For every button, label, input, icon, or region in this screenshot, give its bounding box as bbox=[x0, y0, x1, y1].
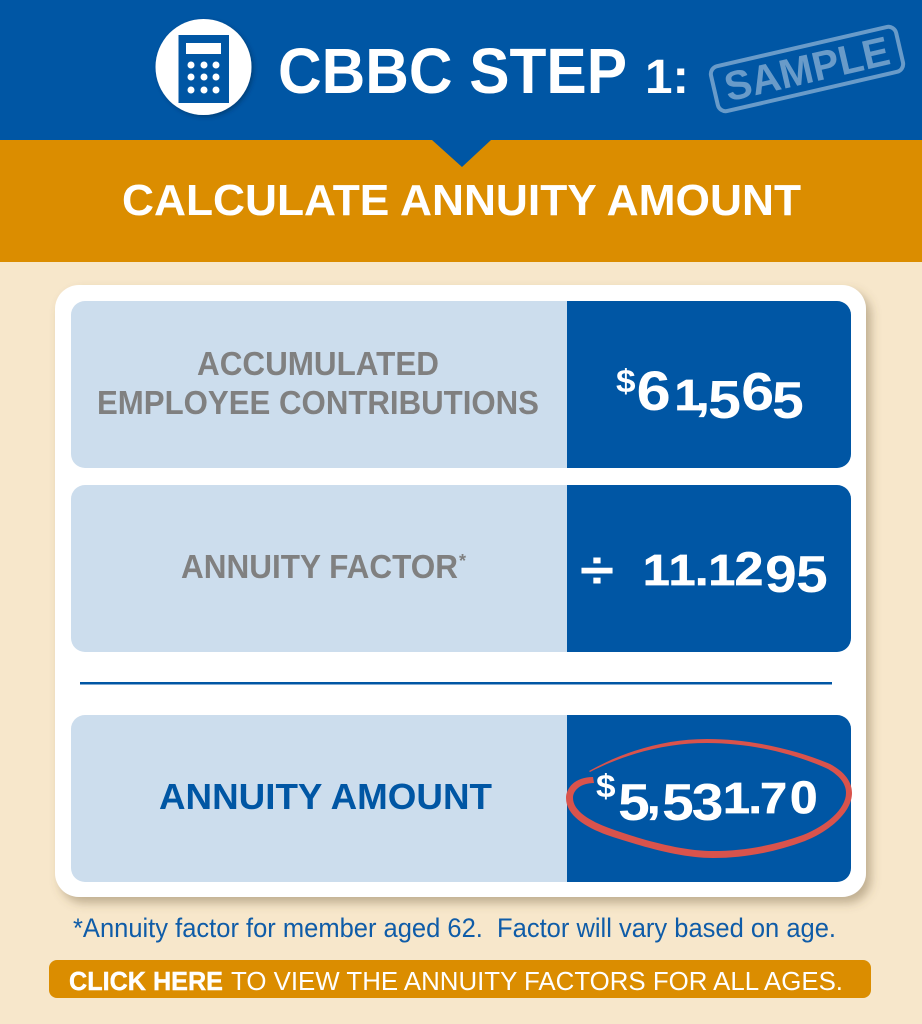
row: accumulated employee contributions: EMPLOYEE CONTRIBUTIONS bbox=[97, 384, 539, 421]
row: annuity factor: ANNUITY FACTOR bbox=[181, 548, 458, 585]
row: annuity factor: 5 bbox=[796, 545, 828, 603]
row: annuity amount: $ bbox=[596, 769, 616, 805]
row: annuity amount: 1 bbox=[723, 773, 750, 823]
row: annuity amount: 5 bbox=[662, 773, 694, 831]
button: click here: CLICK HERE bbox=[69, 966, 223, 996]
row: annuity factor: . bbox=[695, 545, 708, 595]
row: accumulated employee contributions: 5 bbox=[708, 370, 741, 430]
row: annuity amount: 7 bbox=[760, 773, 787, 823]
row: annuity amount: ANNUITY AMOUNT bbox=[159, 776, 492, 817]
row: annuity amount bbox=[71, 715, 852, 882]
row: annuity factor: ÷ bbox=[580, 542, 614, 600]
row: accumulated employee contributions: $ bbox=[616, 364, 636, 400]
row: annuity factor: 2 bbox=[735, 543, 763, 595]
row: accumulated employee contributions: 6 bbox=[637, 361, 671, 422]
button: click here bbox=[49, 960, 871, 998]
header band: step title bbox=[0, 0, 922, 140]
panel: calculation card bbox=[55, 285, 866, 897]
row: accumulated employee contributions: 1 bbox=[675, 370, 701, 420]
row: annuity factor: 9 bbox=[765, 545, 797, 603]
row: annuity factor: 1 bbox=[669, 545, 696, 595]
row: annuity factor: * bbox=[459, 551, 466, 571]
arrow: pointer from header bbox=[432, 140, 491, 167]
subtitle band bbox=[0, 140, 922, 262]
row: annuity factor: 1 bbox=[708, 545, 735, 595]
row: annuity amount: 3 bbox=[692, 773, 723, 831]
row: accumulated employee contributions: 6 bbox=[741, 362, 774, 422]
button: click here: TO VIEW THE ANNUITY FACTORS FOR ALL AGES. bbox=[231, 966, 843, 996]
row: accumulated employee contributions: ACCUMULATED bbox=[197, 345, 439, 382]
row: annuity amount: , bbox=[647, 773, 660, 823]
row: annuity factor: 1 bbox=[643, 545, 670, 595]
title: CBBC STEP bbox=[278, 35, 627, 107]
heading: calculate annuity amount: CALCULATE ANNUITY AMOUNT bbox=[122, 176, 801, 225]
title: 1: bbox=[645, 51, 689, 104]
divider bbox=[80, 682, 832, 684]
row: annuity amount: . bbox=[749, 773, 762, 823]
row: accumulated employee contributions bbox=[71, 301, 851, 468]
row: annuity factor bbox=[71, 485, 851, 652]
row: accumulated employee contributions: , bbox=[696, 370, 709, 420]
stamp: sample: SAMPLE bbox=[720, 28, 894, 110]
callout: red hand-drawn circle bbox=[566, 739, 852, 858]
footnote: *Annuity factor for member aged 62. Factor will vary based on age. bbox=[73, 913, 836, 943]
row: annuity amount: 0 bbox=[790, 773, 818, 823]
row: accumulated employee contributions: 5 bbox=[772, 371, 804, 429]
icon: calculator bbox=[156, 19, 252, 115]
row: annuity amount: 5 bbox=[618, 773, 650, 831]
